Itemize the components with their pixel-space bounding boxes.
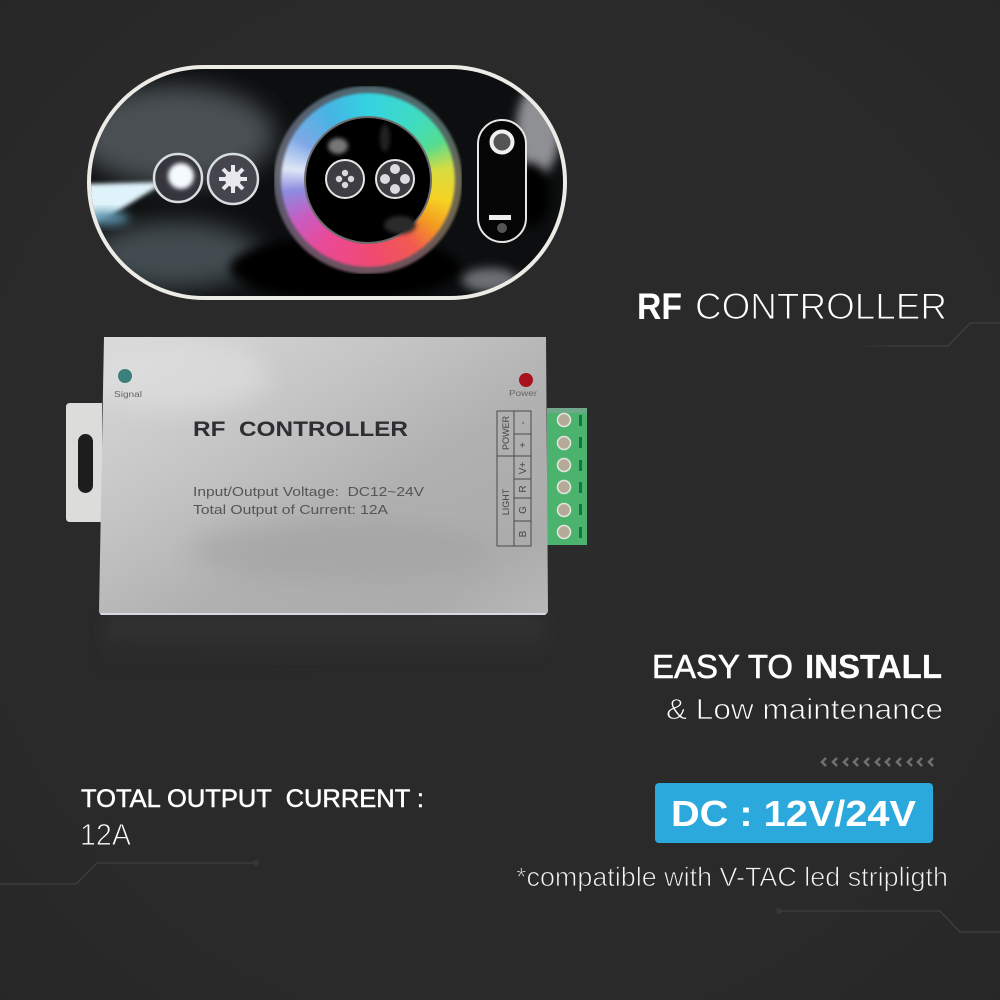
circuit line: bottom right [776,908,1000,932]
button: mode small dots [326,160,364,198]
controller reflection [105,618,545,668]
circuit line: left [0,860,259,884]
pin table: - [518,421,529,425]
button: brightness up [208,154,258,204]
pin table: V+ [518,462,529,474]
chevrons decoration [822,758,933,766]
button: mode large dots [376,160,414,198]
ring centre [305,117,431,243]
pin table: + [518,442,529,448]
power LED: Power [509,389,537,398]
colour ring [274,86,462,274]
metal case [99,337,548,615]
heading: RF controller: RF [637,286,682,327]
case voltage label: Input/Output Voltage: DC12~24V [193,485,425,499]
power switch pill [478,120,526,242]
pin table: LIGHT [501,488,511,515]
voltage badge [655,783,933,843]
pin table: R [518,485,529,493]
subheading: low maintenance: & Low maintenance [666,694,943,726]
remote control [75,65,567,300]
button: brightness down [154,154,202,202]
pin table [497,411,531,546]
heading: easy to install [652,648,942,685]
signal LED: Signal [114,390,142,399]
heading: easy to install: INSTALL [805,648,942,685]
total output current [80,785,424,852]
voltage badge: DC : 12V/24V [671,793,916,834]
signal LED [114,369,142,399]
pin table: B [518,530,529,537]
green terminal block [547,408,587,545]
controller unit [66,337,587,615]
total output current: 12A [80,817,131,852]
heading: easy to install: EASY TO [652,648,793,685]
compatibility note: *compatible with V-TAC led stripligth [516,862,948,892]
case title: RF CONTROLLER [193,418,408,441]
mounting tab [66,403,102,522]
case current label: Total Output of Current: 12A [193,503,389,517]
power LED [509,373,537,398]
total output current: TOTAL OUTPUT CURRENT : [81,785,424,813]
pin table: G [518,506,529,514]
remote body [87,65,567,300]
heading: RF controller: CONTROLLER [695,286,947,327]
pin table: POWER [501,416,511,450]
circuit line: top right [855,323,1000,346]
